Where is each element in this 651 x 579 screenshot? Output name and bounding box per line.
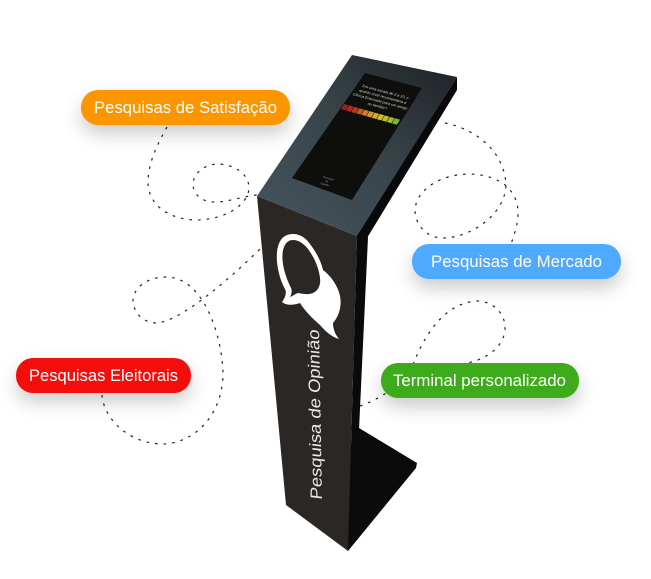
label: Pesquisas de Satisfação: Pesquisas de Satisfação bbox=[94, 99, 277, 117]
label: Pesquisas de Satisfação bbox=[81, 90, 290, 125]
kiosk side of column bbox=[348, 235, 368, 551]
screen footer bbox=[319, 175, 335, 188]
screen footer: Opinião bbox=[319, 181, 331, 187]
kiosk head side edge bbox=[356, 77, 457, 238]
screen question: quanto você recomendaria a bbox=[358, 89, 408, 105]
dashed connector: Terminal personalizado bbox=[360, 301, 505, 406]
dashed connector: Pesquisas de Satisfação bbox=[148, 127, 258, 220]
label: Pesquisas Eleitorais bbox=[16, 358, 191, 393]
label: Pesquisas Eleitorais: Pesquisas Eleitorais bbox=[29, 367, 178, 385]
kiosk front face bbox=[257, 196, 357, 551]
screen question: ou familiar? bbox=[367, 102, 388, 110]
screen rating scale bbox=[341, 104, 400, 125]
screen question bbox=[349, 83, 414, 115]
label: Pesquisas de Mercado bbox=[412, 244, 621, 279]
kiosk base bbox=[330, 428, 417, 551]
label: Pesquisas de Mercado: Pesquisas de Mercado bbox=[431, 253, 602, 271]
touchscreen bbox=[292, 73, 422, 200]
dashed connector: Pesquisas de Mercado bbox=[415, 123, 518, 244]
screen footer: Pesquisa bbox=[322, 175, 335, 181]
label: Terminal personalizado bbox=[381, 363, 579, 398]
speech bubble logo bbox=[277, 234, 341, 339]
kiosk brand text: Pesquisa de Opinião bbox=[304, 328, 326, 500]
label: Terminal personalizado: Terminal personalizado bbox=[393, 372, 566, 390]
screen question: Clínica Ensonada para um amigo bbox=[352, 92, 408, 111]
screen question: Em uma escala de 0 a 10, o bbox=[362, 84, 409, 100]
kiosk terminal bbox=[257, 55, 457, 551]
screen footer: de bbox=[324, 179, 330, 183]
kiosk top panel bbox=[257, 55, 457, 236]
dashed connector: Pesquisas Eleitorais bbox=[102, 233, 276, 444]
